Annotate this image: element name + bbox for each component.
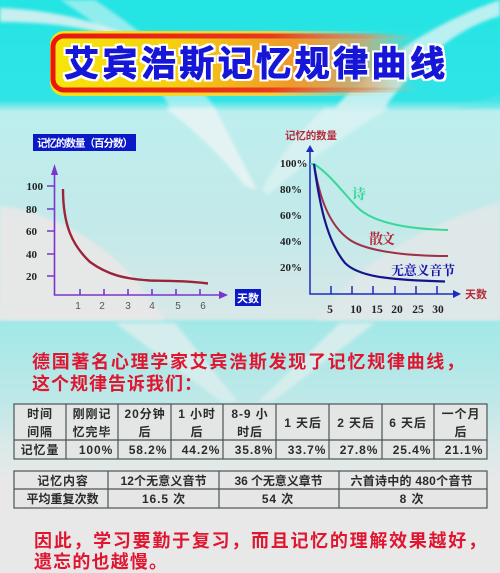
- table values row: 100%: [79, 443, 113, 457]
- curve labels: 诗: [352, 184, 366, 204]
- right chart y-axis labels: 20%: [280, 262, 302, 274]
- left chart x-axis labels: 5: [175, 301, 181, 312]
- right chart x-axis labels: 10: [350, 304, 362, 316]
- nonsense syllables curve: [314, 164, 445, 282]
- table header row: 1 天后: [284, 415, 322, 430]
- right chart y-axis labels: 100%: [280, 158, 308, 170]
- table header row: 20分钟: [125, 406, 165, 421]
- right chart y-axis labels: 80%: [280, 184, 302, 196]
- right chart x-axis labels: 5: [327, 304, 333, 316]
- right chart y-axis labels: 60%: [280, 210, 302, 222]
- left chart y-axis labels: 40: [26, 249, 38, 261]
- retention curve: [63, 189, 208, 284]
- left chart y-axis heading: [33, 134, 136, 151]
- table values row: 35.8%: [235, 443, 273, 457]
- table header row: 6 天后: [389, 415, 427, 430]
- table values row: [21, 442, 483, 457]
- right chart x-axis labels: 30: [432, 304, 444, 316]
- table values row: 27.8%: [340, 443, 378, 457]
- right chart y-axis labels: [280, 158, 308, 274]
- retention data table: [14, 404, 487, 459]
- repetition table: 平均重复次数: [26, 491, 100, 506]
- table header row: 2 天后: [337, 415, 375, 430]
- repetition table: [14, 471, 487, 508]
- repetition table: 12个无意义音节: [120, 473, 208, 488]
- title banner: [50, 31, 450, 96]
- left chart x-axis labels: 3: [125, 301, 131, 312]
- conclusion text: [34, 530, 486, 572]
- right chart: comparison of materials: [280, 129, 487, 316]
- table header row: 时后: [237, 424, 263, 439]
- right chart y-axis heading: 记忆的数量: [285, 129, 338, 142]
- left chart x-axis labels: [75, 301, 206, 312]
- repetition table: 54 次: [262, 491, 294, 506]
- conclusion text: 遗忘的也越慢。: [34, 551, 167, 572]
- prose curve: [314, 164, 448, 256]
- table header row: 忆完毕: [73, 424, 111, 439]
- table header row: 1 小时: [178, 407, 216, 421]
- left chart y-axis labels: 60: [26, 226, 38, 238]
- intro text: [32, 351, 464, 394]
- right chart y-axis labels: 40%: [280, 236, 302, 248]
- table header row: 后: [191, 424, 203, 439]
- table header row: 后: [139, 424, 151, 439]
- table header row: 8-9 小: [231, 407, 269, 421]
- repetition table: 六首诗中的 480个音节: [350, 473, 474, 488]
- intro text: 这个规律告诉我们：: [32, 373, 202, 394]
- left chart y-axis labels: 100: [26, 181, 44, 193]
- table header row: [27, 406, 480, 439]
- right chart x-axis labels: 20: [391, 304, 403, 316]
- table header row: 时间: [27, 407, 53, 421]
- x-axis unit label: 天数: [465, 287, 487, 301]
- table values row: 44.2%: [182, 443, 220, 457]
- left chart x-axis labels: 6: [200, 301, 206, 312]
- repetition table: 记忆内容: [37, 473, 89, 488]
- left chart: memory retention curve: [26, 134, 261, 312]
- x-axis unit label: [235, 289, 261, 306]
- right chart x-axis labels: 15: [371, 304, 383, 316]
- intro text: 德国著名心理学家艾宾浩斯发现了记忆规律曲线，: [32, 351, 464, 372]
- right chart x-axis labels: [327, 304, 444, 316]
- table values row: 21.1%: [445, 443, 483, 457]
- right chart x-axis labels: 25: [412, 304, 424, 316]
- title: 艾宾浩斯记忆规律曲线: [64, 45, 445, 84]
- left chart x-axis labels: 1: [75, 301, 81, 312]
- table values row: 25.4%: [393, 443, 431, 457]
- table header row: 间隔: [27, 425, 53, 439]
- conclusion text: 因此，学习要勤于复习，而且记忆的理解效果越好，: [34, 530, 486, 551]
- left chart x-axis labels: 4: [149, 301, 155, 312]
- table header row: 刚刚记: [73, 407, 111, 421]
- right chart: comparison of materials: 无意义音节: [391, 260, 455, 279]
- table values row: 58.2%: [129, 443, 167, 457]
- poetry curve: [310, 164, 448, 230]
- left chart y-axis heading: 记忆的数量（百分数）: [37, 136, 133, 150]
- repetition table: 16.5 次: [142, 491, 186, 506]
- table values row: 记忆量: [21, 442, 59, 457]
- left chart y-axis labels: [26, 181, 44, 283]
- repetition table: 8 次: [400, 491, 424, 506]
- table header row: 后: [455, 424, 467, 439]
- table header row: 一个月: [442, 407, 480, 421]
- left chart x-axis labels: 2: [99, 301, 105, 312]
- right chart: comparison of materials: 散文: [369, 229, 395, 249]
- table values row: 33.7%: [288, 443, 326, 457]
- left chart y-axis labels: 20: [26, 271, 38, 283]
- left chart y-axis labels: 80: [26, 204, 38, 216]
- repetition table: 36 个无意义章节: [234, 473, 324, 488]
- x-axis unit label: 天数: [237, 291, 259, 305]
